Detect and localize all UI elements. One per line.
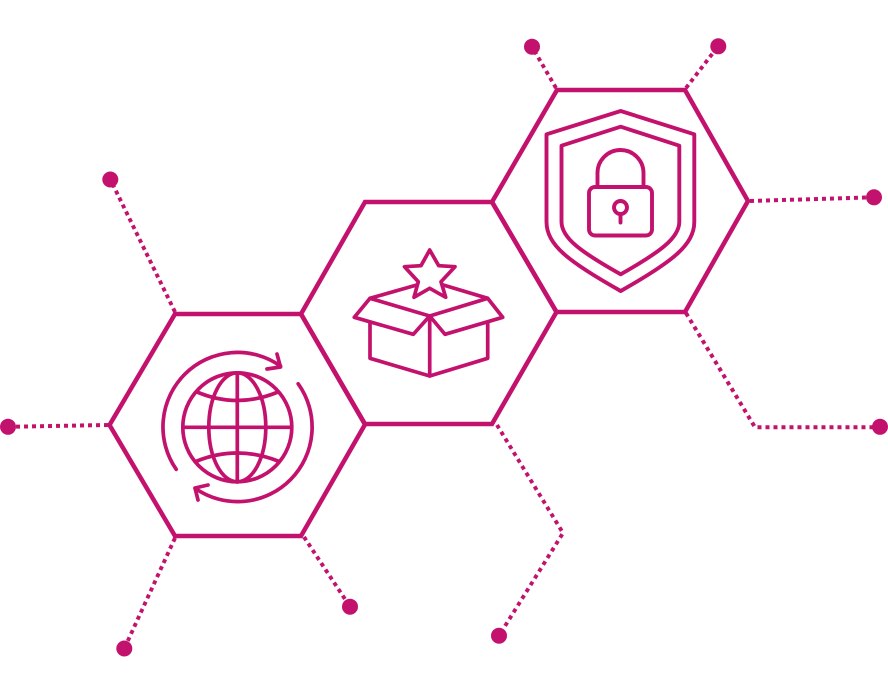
hexagon: middle: [301, 202, 556, 424]
icon: shield with padlock: [546, 111, 694, 291]
icon: globe with rotating arrows: [163, 352, 312, 502]
connector: elbow right of bottom: [686, 313, 888, 435]
hexagon: left: [110, 314, 365, 536]
connector: right: [750, 189, 882, 205]
connector: top left: [524, 39, 556, 88]
hexagon: right: [492, 90, 748, 312]
connector: lower centre: [304, 537, 358, 615]
icon: open box with star: [354, 250, 503, 376]
connector: elbow below middle hexagon: [491, 425, 563, 644]
connector: left: [0, 419, 108, 435]
connector: lower left: [116, 538, 175, 656]
connector: upper left: [102, 172, 175, 312]
connector: top right: [686, 38, 726, 88]
